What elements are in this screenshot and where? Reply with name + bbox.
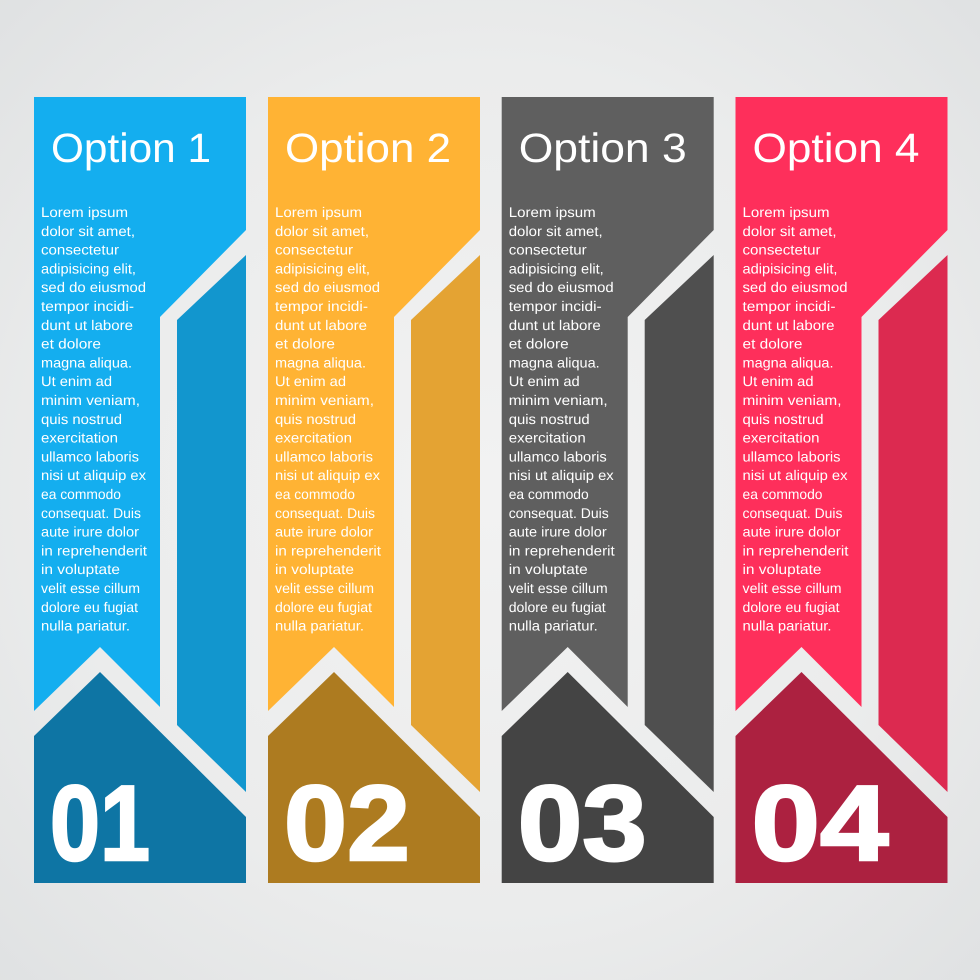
- body text: minim veniam,: [742, 392, 842, 408]
- body text: nisi ut aliquip ex: [509, 467, 614, 483]
- body text: tempor incidi-: [742, 298, 836, 314]
- heading: Option 4: [752, 125, 920, 171]
- body text: nisi ut aliquip ex: [275, 467, 380, 483]
- body text: ea commodo: [742, 486, 823, 502]
- body text: ullamco laboris: [275, 448, 373, 464]
- body text: minim veniam,: [41, 392, 140, 408]
- body text: quis nostrud: [742, 411, 824, 427]
- body text: dolore eu fugiat: [742, 599, 840, 615]
- body text: Ut enim ad: [275, 373, 346, 389]
- body text: in voluptate: [509, 561, 588, 577]
- body text: nulla pariatur.: [742, 618, 832, 634]
- number: 02: [284, 763, 410, 883]
- body text: aute irure dolor: [742, 524, 841, 540]
- body text: minim veniam,: [275, 392, 374, 408]
- body text: sed do eiusmod: [742, 279, 848, 295]
- light main banner: [736, 97, 948, 711]
- body text: velit esse cillum: [742, 580, 842, 596]
- body text: sed do eiusmod: [509, 279, 614, 295]
- body text: dolor sit amet,: [742, 223, 836, 239]
- body text: tempor incidi-: [41, 298, 134, 314]
- body text: [275, 204, 381, 634]
- body text: nulla pariatur.: [509, 618, 598, 634]
- body text: ullamco laboris: [41, 448, 139, 464]
- number block: [268, 672, 480, 883]
- body text: ullamco laboris: [742, 448, 840, 464]
- body text: exercitation: [509, 430, 586, 446]
- body text: in voluptate: [275, 561, 354, 577]
- body text: dolore eu fugiat: [509, 599, 606, 615]
- body text: aute irure dolor: [275, 524, 373, 540]
- panel: option 1: [34, 97, 246, 883]
- body text: dunt ut labore: [509, 317, 601, 333]
- body text: consectetur: [509, 242, 587, 258]
- body text: ullamco laboris: [509, 448, 607, 464]
- body text: Lorem ipsum: [275, 204, 362, 220]
- panel: option 4: [736, 97, 948, 883]
- body text: et dolore: [41, 336, 101, 352]
- body text: consectetur: [275, 242, 353, 258]
- body text: aute irure dolor: [41, 524, 139, 540]
- body text: consequat. Duis: [275, 505, 375, 521]
- body text: [509, 204, 615, 634]
- body text: [41, 204, 147, 634]
- body text: adipisicing elit,: [275, 260, 370, 276]
- body text: consectetur: [742, 242, 821, 258]
- light main banner: [34, 97, 246, 711]
- heading: Option 2: [285, 125, 451, 171]
- number block: [736, 672, 948, 883]
- body text: consequat. Duis: [742, 505, 842, 521]
- body text: magna aliqua.: [509, 354, 600, 370]
- body text: minim veniam,: [509, 392, 608, 408]
- body text: ea commodo: [509, 486, 589, 502]
- number block: [34, 672, 246, 883]
- body text: adipisicing elit,: [509, 260, 604, 276]
- body text: in reprehenderit: [275, 542, 381, 558]
- body text: exercitation: [275, 430, 352, 446]
- panel: option 2: [268, 97, 480, 883]
- heading: Option 3: [519, 125, 687, 171]
- body text: Ut enim ad: [742, 373, 814, 389]
- body text: consequat. Duis: [41, 505, 141, 521]
- body text: in voluptate: [41, 561, 120, 577]
- body text: magna aliqua.: [742, 354, 834, 370]
- body text: sed do eiusmod: [41, 279, 146, 295]
- body text: tempor incidi-: [275, 298, 368, 314]
- body text: aute irure dolor: [509, 524, 607, 540]
- body text: dolor sit amet,: [41, 223, 135, 239]
- body text: Ut enim ad: [509, 373, 580, 389]
- body text: quis nostrud: [275, 411, 356, 427]
- body text: dunt ut labore: [275, 317, 367, 333]
- body text: nulla pariatur.: [275, 618, 364, 634]
- body text: adipisicing elit,: [742, 260, 838, 276]
- body text: dolor sit amet,: [275, 223, 369, 239]
- body text: nisi ut aliquip ex: [41, 467, 146, 483]
- body text: in reprehenderit: [509, 542, 615, 558]
- body text: exercitation: [742, 430, 820, 446]
- body text: [742, 204, 849, 634]
- body text: et dolore: [509, 336, 569, 352]
- body text: et dolore: [275, 336, 335, 352]
- body text: adipisicing elit,: [41, 260, 136, 276]
- side strip: [878, 255, 948, 792]
- panel: option 3: [502, 97, 714, 883]
- body text: velit esse cillum: [275, 580, 374, 596]
- body text: in reprehenderit: [742, 542, 849, 558]
- body text: dolore eu fugiat: [41, 599, 138, 615]
- body text: dolor sit amet,: [509, 223, 603, 239]
- body text: in voluptate: [742, 561, 822, 577]
- side strip: [177, 255, 246, 792]
- body text: magna aliqua.: [41, 354, 132, 370]
- body text: quis nostrud: [509, 411, 590, 427]
- body text: Ut enim ad: [41, 373, 112, 389]
- body text: Lorem ipsum: [509, 204, 596, 220]
- body text: nulla pariatur.: [41, 618, 130, 634]
- body text: velit esse cillum: [41, 580, 140, 596]
- body text: in reprehenderit: [41, 542, 147, 558]
- side strip: [645, 255, 714, 792]
- number: 04: [752, 763, 888, 883]
- body text: consectetur: [41, 242, 119, 258]
- body text: sed do eiusmod: [275, 279, 380, 295]
- heading: Option 1: [51, 125, 211, 171]
- side strip: [411, 255, 480, 792]
- number block: [502, 672, 714, 883]
- body text: dolore eu fugiat: [275, 599, 372, 615]
- body text: ea commodo: [275, 486, 355, 502]
- light main banner: [268, 97, 480, 711]
- light main banner: [502, 97, 714, 711]
- body text: nisi ut aliquip ex: [742, 467, 848, 483]
- body text: dunt ut labore: [41, 317, 133, 333]
- body text: et dolore: [742, 336, 803, 352]
- body text: tempor incidi-: [509, 298, 602, 314]
- body text: Lorem ipsum: [742, 204, 830, 220]
- body text: ea commodo: [41, 486, 121, 502]
- body text: Lorem ipsum: [41, 204, 128, 220]
- body text: exercitation: [41, 430, 118, 446]
- body text: velit esse cillum: [509, 580, 608, 596]
- body text: consequat. Duis: [509, 505, 609, 521]
- body text: quis nostrud: [41, 411, 122, 427]
- number: 01: [50, 763, 150, 883]
- body text: magna aliqua.: [275, 354, 366, 370]
- number: 03: [518, 763, 647, 883]
- body text: dunt ut labore: [742, 317, 835, 333]
